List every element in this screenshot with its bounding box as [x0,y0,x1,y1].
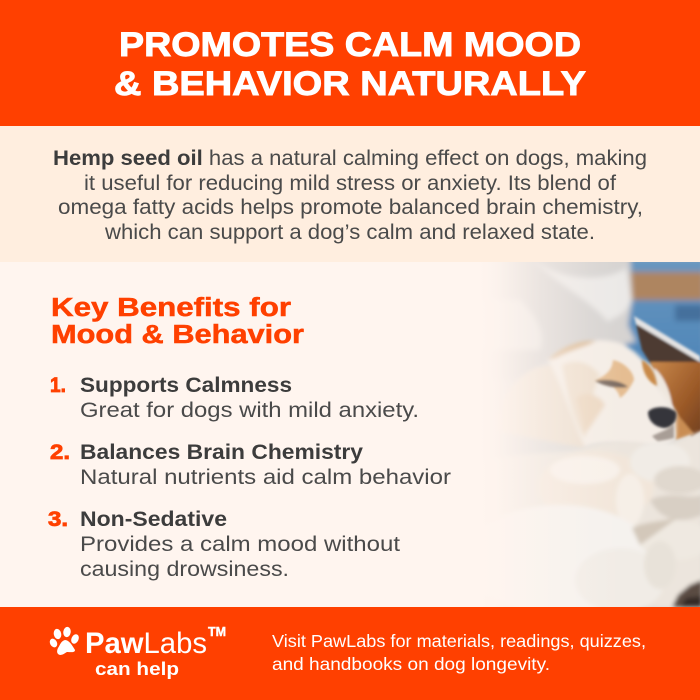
can help: can help [95,658,179,679]
benefit 3: causing drowsiness. [80,558,289,581]
title: PROMOTES CALM MOOD [119,26,581,64]
logo: PawLabs can help: TM [208,625,226,639]
benefit 3: 3. [48,508,68,531]
intro text: it useful for reducing mild stress or anxiety. Its blend of [84,172,616,195]
benefit 1: Supports Calmness [80,374,292,397]
benefit 3: Provides a calm mood without [80,533,400,556]
dog head [550,339,680,446]
footer text: Visit PawLabs for materials, readings, quizzes, [272,631,646,651]
footer text [272,631,646,674]
logo: PawLabs can help [48,625,226,679]
background: sky, wood and pillow [561,262,700,367]
header band [0,0,700,126]
heading: key benefits [51,294,304,349]
benefit 3 [48,508,400,581]
panel: benefits background [0,262,700,607]
intro text: Hemp seed oil has a natural calming effect on dogs, making [53,147,647,170]
footer band [0,607,700,700]
title [114,26,586,103]
benefit 2 [50,441,451,489]
wordmark: PawLabs [85,627,207,660]
benefit 2: Natural nutrients aid calm behavior [80,466,451,489]
benefit 2: 2. [50,441,70,464]
photo fade [480,262,610,607]
dog face markings [594,360,676,442]
heading: key benefits: Key Benefits for [51,294,291,322]
benefit 2: Balances Brain Chemistry [80,441,363,464]
intro text [53,147,647,244]
title: & BEHAVIOR NATURALLY [114,65,586,103]
icon: paw print [48,626,80,655]
heading: key benefits: Mood & Behavior [51,321,304,349]
benefit 1: 1. [50,374,66,397]
benefit 1: Great for dogs with mild anxiety. [80,399,419,422]
intro text: which can support a dog’s calm and relaxed state. [104,221,595,244]
white fur [526,429,700,607]
benefit 1 [50,374,419,422]
panel: intro [0,126,700,262]
benefit 3: Non-Sedative [80,508,227,531]
intro text: omega fatty acids helps promote balanced brain chemistry, [58,196,643,219]
photo: sleeping dog on white fur [510,262,700,607]
footer text: and handbooks on dog longevity. [272,654,550,674]
